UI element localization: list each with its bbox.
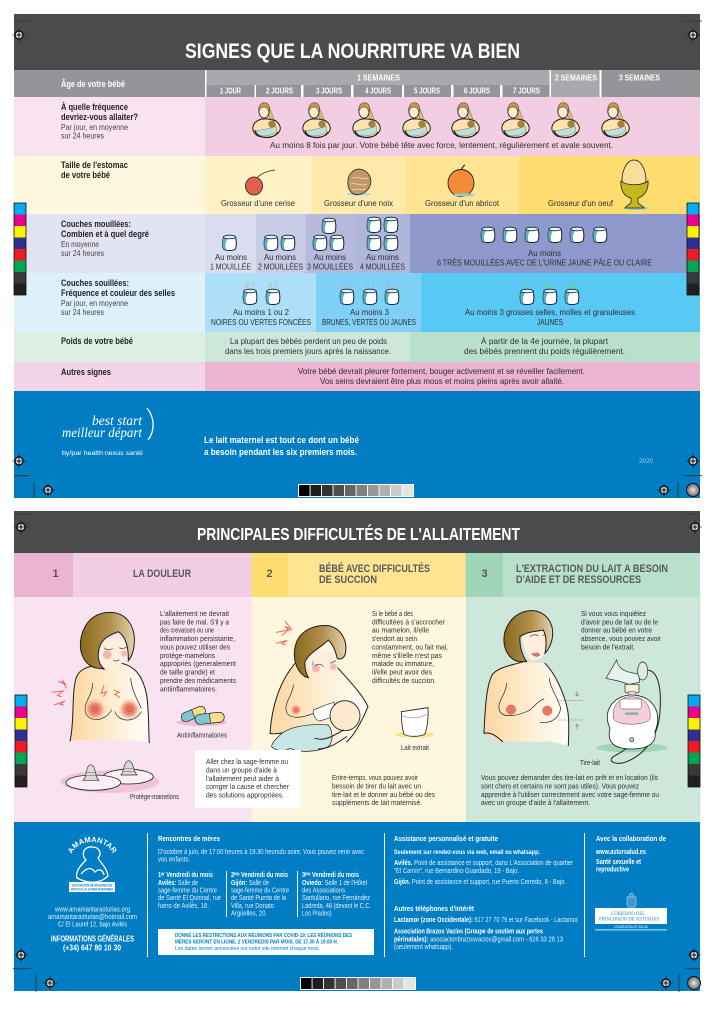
text: inquiétude: besoin de l'extrait. bbox=[581, 642, 635, 652]
text: inquiétude: Si vous vous inquiétez bbox=[581, 609, 646, 618]
rencontres de mères: sage-femme du Centre bbox=[158, 888, 217, 894]
column: la douleur: Antiinflammatoires bbox=[177, 733, 227, 740]
rencontres de mères bbox=[158, 834, 371, 918]
logo: best start: meilleur départ bbox=[62, 426, 143, 441]
text: la douleur: antiinflammatoires. bbox=[160, 684, 217, 693]
text: succion: difficultées à s'accrocher bbox=[372, 617, 445, 626]
row: soiled diapers: Au moins 3 grosses selles, molles et granuleuses bbox=[465, 307, 635, 317]
assistance: Seulement sur rendez-vous via web, email ou whatsapp. bbox=[394, 849, 540, 856]
row: baby weight: À partir de la 4e journée, la plupart bbox=[481, 336, 609, 346]
row: stomach size bbox=[14, 156, 700, 214]
section headers: D'AIDE ET DE RESSOURCES bbox=[516, 574, 641, 586]
footer: contacts bbox=[14, 822, 700, 991]
section headers: 3 bbox=[482, 568, 488, 580]
row: other signs: Vos seins devraient être plus mous et moins pleins après avoir allaité. bbox=[320, 376, 564, 386]
rencontres de mères: Avilés: Salle de bbox=[158, 880, 198, 887]
association contact details bbox=[48, 906, 137, 953]
row: age of baby: 1 JOUR bbox=[220, 86, 241, 96]
slogan bbox=[204, 435, 359, 457]
text: inquiétude: absence, vous pouvez avoir bbox=[581, 634, 661, 643]
row: age of baby bbox=[14, 70, 700, 97]
text: entre-temps: Entre-temps, vous pouvez avoir bbox=[332, 773, 418, 782]
row: soiled diapers: NOIRES OU VERTES FONCÉES bbox=[211, 317, 311, 327]
row: age of baby: 3 JOURS bbox=[316, 86, 343, 96]
illustration: mother with baby bbox=[270, 621, 368, 751]
rencontres de mères: D'octobre à juin, de 17.00 heures à 19.30 heursdu soire. Vous pouvez venir avec bbox=[158, 849, 364, 856]
rencontres de mères: 2ᵐᵉ Vendredi du mois bbox=[231, 872, 288, 879]
title: PRINCIPALES DIFFICULTÉS DE L'ALLAITEMENT bbox=[197, 523, 520, 544]
icon: egg cup bbox=[621, 160, 648, 210]
row: baby weight: Poids de votre bébé bbox=[61, 336, 133, 346]
callout: sage-femme: l'allaitement peut aider à bbox=[206, 774, 280, 783]
text: la douleur bbox=[160, 609, 237, 693]
text: succion: malade ou immature, bbox=[372, 659, 434, 668]
rencontres de mères: 3ᵐᵉ Vendredi du mois bbox=[302, 872, 359, 879]
row: stomach size: Grosseur d'un abricot bbox=[425, 198, 500, 208]
logo: amamantar: ASOCIACIÓN DE MUJERES DE bbox=[72, 882, 112, 888]
collaboration: CONSEJERÍA DE SALUD bbox=[614, 925, 648, 929]
text: la douleur: des crevasses ou une bbox=[160, 626, 214, 635]
text: succion bbox=[372, 609, 448, 685]
collaboration: reproductive bbox=[596, 866, 629, 874]
row: soiled diapers: Fréquence et couleur des selles bbox=[61, 288, 175, 298]
text: succion: il/elle peut avoir des bbox=[372, 668, 432, 677]
row: baby weight: des bébés prennent du poids régulièrement. bbox=[464, 346, 625, 356]
text: la douleur: protège-mamelons bbox=[160, 651, 215, 660]
row: soiled diapers: Par jour, en moyenne bbox=[61, 299, 128, 308]
callout: sage-femme: dans un groupe d'aide à bbox=[206, 766, 278, 774]
text: succion: Si le bébé a des bbox=[372, 609, 413, 618]
section headers: DE SUCCION bbox=[319, 574, 377, 586]
autres téléphones: Association Brazos Vacíos (Groupe de soutien aux pertes bbox=[394, 929, 543, 936]
autres téléphones: Lactamor (zone Occidentale): 617 27 70 79 et sur Facebook - Lactamor. bbox=[394, 917, 579, 924]
row: wet diapers: Couches mouillées: bbox=[61, 219, 131, 229]
logo: best start: by/par health nexus santé bbox=[62, 450, 143, 457]
row: wet diapers: Au moins bbox=[314, 252, 346, 262]
header band bbox=[14, 14, 700, 70]
row: age of baby: 7 JOURS bbox=[513, 86, 541, 96]
column: extraction du lait: Tire-lait bbox=[580, 760, 600, 767]
column: extraction du lait bbox=[466, 597, 700, 822]
autres téléphones: (seulement whatsapp). bbox=[394, 944, 453, 951]
autres téléphones: périnatales): asociacionbrazosvacios@gmail.com - 626 33 28 13 bbox=[394, 936, 563, 943]
text: succion: au mamelon, il/elle bbox=[372, 626, 429, 635]
row: wet diapers: Combien et à quel degré bbox=[61, 229, 149, 239]
row: age of baby: 3 SEMAINES bbox=[619, 74, 661, 82]
text: tire-lait bbox=[481, 773, 659, 807]
section headers: 1 bbox=[52, 568, 59, 580]
section headers bbox=[14, 553, 700, 597]
row: baby weight bbox=[14, 332, 700, 362]
rencontres de mères: sage-femme du Centre bbox=[231, 888, 289, 894]
notice: covid: Les dates seront annoncées sur notre site internet chaque mois. bbox=[175, 946, 320, 952]
row: feeding frequency: sur 24 heures bbox=[61, 132, 104, 140]
row: stomach size: Grosseur d'une cerise bbox=[221, 198, 295, 208]
row: soiled diapers: Au moins 3 bbox=[350, 307, 389, 317]
collaboration: www.astursalud.es bbox=[595, 849, 646, 856]
callout: sage-femme: corriger la cause et chercher bbox=[206, 782, 289, 791]
text: la douleur: L'allaitement ne devrait bbox=[160, 609, 230, 618]
association contact details: amamantarasturias@hotmail.com bbox=[48, 914, 137, 921]
association contact details: (+34) 647 80 10 30 bbox=[63, 943, 121, 953]
row: other signs bbox=[14, 362, 700, 391]
text: la douleur: vous pouvez utiliser des bbox=[160, 642, 230, 652]
panel: principales difficultés bbox=[14, 511, 700, 991]
row: other signs: Autres signes bbox=[61, 367, 111, 377]
row: age of baby: 4 JOURS bbox=[365, 86, 392, 96]
rencontres de mères: 1ᵉʳ Vendredi du mois bbox=[158, 872, 213, 879]
rencontres de mères: de Santé Puerta de la bbox=[231, 895, 286, 902]
row: age of baby: 5 JOURS bbox=[414, 86, 441, 96]
association contact details: C/ El Laurel 12, bajo Avilés bbox=[58, 922, 127, 929]
logo: amamantar bbox=[68, 836, 116, 892]
assistance bbox=[394, 834, 574, 886]
footer band bbox=[14, 391, 700, 498]
icon: capsules bbox=[177, 705, 227, 726]
row: soiled diapers: Au moins 1 ou 2 bbox=[233, 307, 289, 317]
row: wet diapers: 6 TRÈS MOUILLÉES AVEC DE L'URINE JAUNE PÂLE OU CLAIRE bbox=[437, 258, 652, 268]
row: wet diapers: Au moins bbox=[366, 252, 399, 262]
row: baby weight: dans les trois premiers jours après la naissance. bbox=[225, 346, 391, 356]
row: stomach size: Grosseur d'une noix bbox=[324, 198, 394, 208]
text: tire-lait: avec un groupe d'aide à l'allaitement. bbox=[481, 798, 590, 807]
collaboration: PRINCIPADO DE ASTURIAS bbox=[599, 917, 659, 923]
row: wet diapers: Au moins bbox=[528, 248, 561, 258]
notice: covid bbox=[158, 929, 374, 955]
row: other signs: Votre bébé devrait pleurer fortement, bouger activement et se réveiller facilement. bbox=[298, 366, 585, 376]
logo: best start bbox=[62, 408, 153, 457]
row: soiled diapers: Couches souillées: bbox=[61, 278, 129, 288]
collaboration: Avec la collaboration de bbox=[596, 834, 666, 843]
section headers: LA DOULEUR bbox=[133, 568, 191, 580]
row: soiled diapers: BRUNES, VERTES OU JAUNES bbox=[322, 317, 416, 327]
row: age of baby: Âge de votre bébé bbox=[61, 78, 125, 89]
text: la douleur: pas faire de mal. S'il y a bbox=[160, 617, 230, 626]
row: wet diapers: 1 MOUILLÉE bbox=[210, 262, 251, 272]
text: la douleur: appropriés (generalement bbox=[160, 659, 237, 668]
icon: nipple shields bbox=[61, 761, 159, 793]
row: age of baby: 2 SEMAINES bbox=[555, 74, 598, 82]
rencontres de mères: Ladreda, 48 (devant le C.C. bbox=[302, 903, 371, 910]
title: SIGNES QUE LA NOURRITURE VA BIEN bbox=[185, 40, 520, 63]
rencontres de mères: fuero de Avilés, 18. bbox=[158, 903, 209, 910]
rencontres de mères: Oviedo: Salle 1 de l'Hôtel bbox=[302, 880, 367, 887]
text: inquiétude bbox=[581, 609, 661, 652]
icon: cup of expressed milk bbox=[395, 708, 434, 738]
row: wet diapers: En moyenne bbox=[61, 240, 99, 249]
row: feeding frequency: devriez-vous allaiter? bbox=[61, 112, 138, 122]
section headers: L'EXTRACTION DU LAIT A BESOIN bbox=[516, 563, 668, 575]
rencontres de mères: de Santé El Quirinal, rue bbox=[158, 895, 221, 902]
assistance: Assistance personnalisé et gratuite bbox=[394, 834, 498, 843]
row: wet diapers: Au moins bbox=[215, 252, 247, 262]
text: entre-temps: bessoin de tirer du lait avec un bbox=[332, 782, 421, 790]
row: stomach size: de votre bébé bbox=[61, 170, 110, 180]
association contact details: www.amamantarasturias.org bbox=[54, 906, 130, 914]
footer band: 2020 bbox=[639, 458, 653, 465]
row: feeding frequency: À quelle fréquence bbox=[61, 102, 128, 112]
assistance: Gijón. Point de assistance et support, rue Puerto Cerredo, 8 - Bajo. bbox=[394, 879, 566, 886]
illustration: woman in pain bbox=[52, 612, 149, 743]
rencontres de mères: Argüelles, 20. bbox=[231, 910, 267, 918]
column: bébé avec difficultés bbox=[252, 597, 466, 822]
rencontres de mères: Gijón: Salle de bbox=[231, 880, 269, 887]
text: entre-temps bbox=[332, 773, 435, 807]
row: soiled diapers: sur 24 heures bbox=[61, 308, 104, 317]
row: wet diapers: Au moins bbox=[264, 252, 296, 262]
row: feeding frequency: Par jour, en moyenne bbox=[61, 123, 128, 132]
logo: best start: best start bbox=[92, 414, 143, 429]
rencontres de mères: des Associations bbox=[302, 888, 345, 894]
row: feeding frequency: Au moins 8 fois par jour. Votre bébé tête avec force, lentement, régulièrement et avale souvent. bbox=[270, 140, 613, 150]
illustration: breast pump bbox=[596, 660, 667, 763]
text: tire-lait: sont chers et certains ne sont pas utiles). Vous pouvez bbox=[481, 782, 639, 790]
icon: apricot bbox=[448, 165, 475, 196]
row: baby weight: La plupart des bébés perdent un peu de poids bbox=[230, 336, 387, 346]
row: wet diapers: 3 MOUILLÉES bbox=[307, 262, 353, 272]
assistance: "El Camín", rue Bernardino Guardado, 19 - Bajo. bbox=[394, 868, 519, 875]
notice: covid: MÈRES SERONT EN LIGNE, 2 VENDREDIS PAR MOIS, DE 17.30 À 19.00 H. bbox=[175, 938, 338, 946]
text: tire-lait: Vous pouvez demander des tire-lait en prêt et en location (ils bbox=[481, 773, 658, 782]
row: feeding frequency bbox=[14, 97, 700, 156]
illustration: woman expressing milk bbox=[483, 611, 583, 746]
row: age of baby: 2 JOURS bbox=[266, 86, 294, 96]
slogan: Le lait maternel est tout ce dont un bébé bbox=[204, 435, 359, 445]
row: wet diapers: sur 24 heures bbox=[61, 249, 104, 258]
text: inquiétude: donner au bébé en votre bbox=[581, 626, 652, 635]
rencontres de mères: Rencontres de mères bbox=[158, 834, 220, 843]
header band bbox=[14, 511, 700, 553]
row: stomach size: Taille de l'estomac bbox=[61, 160, 128, 170]
slogan: a besoin pendant les six premiers mois. bbox=[204, 447, 357, 457]
row: wet diapers: 4 MOUILLÉES bbox=[360, 262, 405, 272]
section headers: BÉBÉ AVEC DIFFICULTÉS bbox=[319, 562, 430, 575]
association contact details: INFORMATIONS GÉNÉRALES bbox=[51, 934, 134, 944]
callout: sage-femme: des solutions appropriées. bbox=[206, 790, 284, 800]
icon: cherry bbox=[246, 170, 275, 195]
text: la douleur: prendre des médicaments bbox=[160, 676, 236, 685]
row: stomach size: Grosseur d'un oeuf bbox=[548, 198, 614, 208]
row: age of baby: 1 SEMAINES bbox=[357, 74, 401, 82]
text: inquiétude: d'avoir peu de lait ou de le bbox=[581, 617, 658, 626]
logo: amamantar: AMAMANTAR bbox=[68, 836, 116, 854]
row: wet diapers: 2 MOUILLÉES bbox=[258, 262, 303, 272]
rencontres de mères: Los Prados). bbox=[302, 910, 333, 918]
text: succion: difficultés de succion. bbox=[372, 676, 436, 685]
text: entre-temps: tire-lait et le donner au bébé ou des bbox=[332, 790, 435, 799]
logo: amamantar: APOYO A LA LACTANCIA MATERNA bbox=[71, 888, 114, 892]
row: soiled diapers bbox=[14, 273, 700, 332]
autres téléphones bbox=[394, 904, 579, 951]
notice: covid: DONNÉ LES RESTRICTIONS AUX RÉUNIONS PAR COVID-19: LES RÉUNIONS DES bbox=[175, 931, 352, 939]
collaboration bbox=[595, 834, 667, 930]
callout: sage-femme bbox=[195, 750, 301, 808]
callout: sage-femme: Aller chez la sage-femme ou bbox=[206, 757, 288, 766]
section headers: 2 bbox=[266, 568, 273, 580]
text: succion: même s'il/elle n'est pas bbox=[372, 651, 442, 660]
text: succion: constamment, ou fait mal, bbox=[372, 642, 448, 652]
text: tire-lait: apprendre à l'utiliser correctement avec votre sage-femme ou bbox=[481, 790, 659, 799]
rencontres de mères: Santullano, rue Fernández bbox=[302, 895, 370, 902]
row: age of baby: 6 JOURS bbox=[464, 86, 491, 96]
row: soiled diapers: JAUNES bbox=[537, 317, 563, 327]
column: la douleur: Protège-mamelons bbox=[130, 794, 179, 801]
rencontres de mères: vos enfants: bbox=[158, 856, 190, 864]
icon: walnut bbox=[347, 169, 371, 196]
assistance: Avilés. Point de assistance et support, dans L'Association de quartier bbox=[394, 860, 574, 867]
text: la douleur: inflammation persistante, bbox=[160, 634, 235, 643]
text: la douleur: de taille grande) et bbox=[160, 668, 216, 677]
row: wet diapers bbox=[14, 214, 700, 273]
text: succion: s'endort au sein bbox=[372, 634, 417, 643]
column: bébé avec difficultés: Lait extrait bbox=[401, 745, 429, 752]
rencontres de mères: Villa, rue Donato bbox=[231, 903, 274, 910]
column: la douleur bbox=[14, 597, 252, 822]
text: entre-temps: suppléments de lait maternisé. bbox=[332, 798, 422, 807]
autres téléphones: Autres téléphones d'intérêt bbox=[394, 904, 474, 913]
collaboration: GOBIERNO DEL bbox=[611, 911, 646, 917]
collaboration: Santé sexuelle et bbox=[596, 859, 642, 866]
panel: signes que la nourriture va bien bbox=[14, 14, 700, 498]
